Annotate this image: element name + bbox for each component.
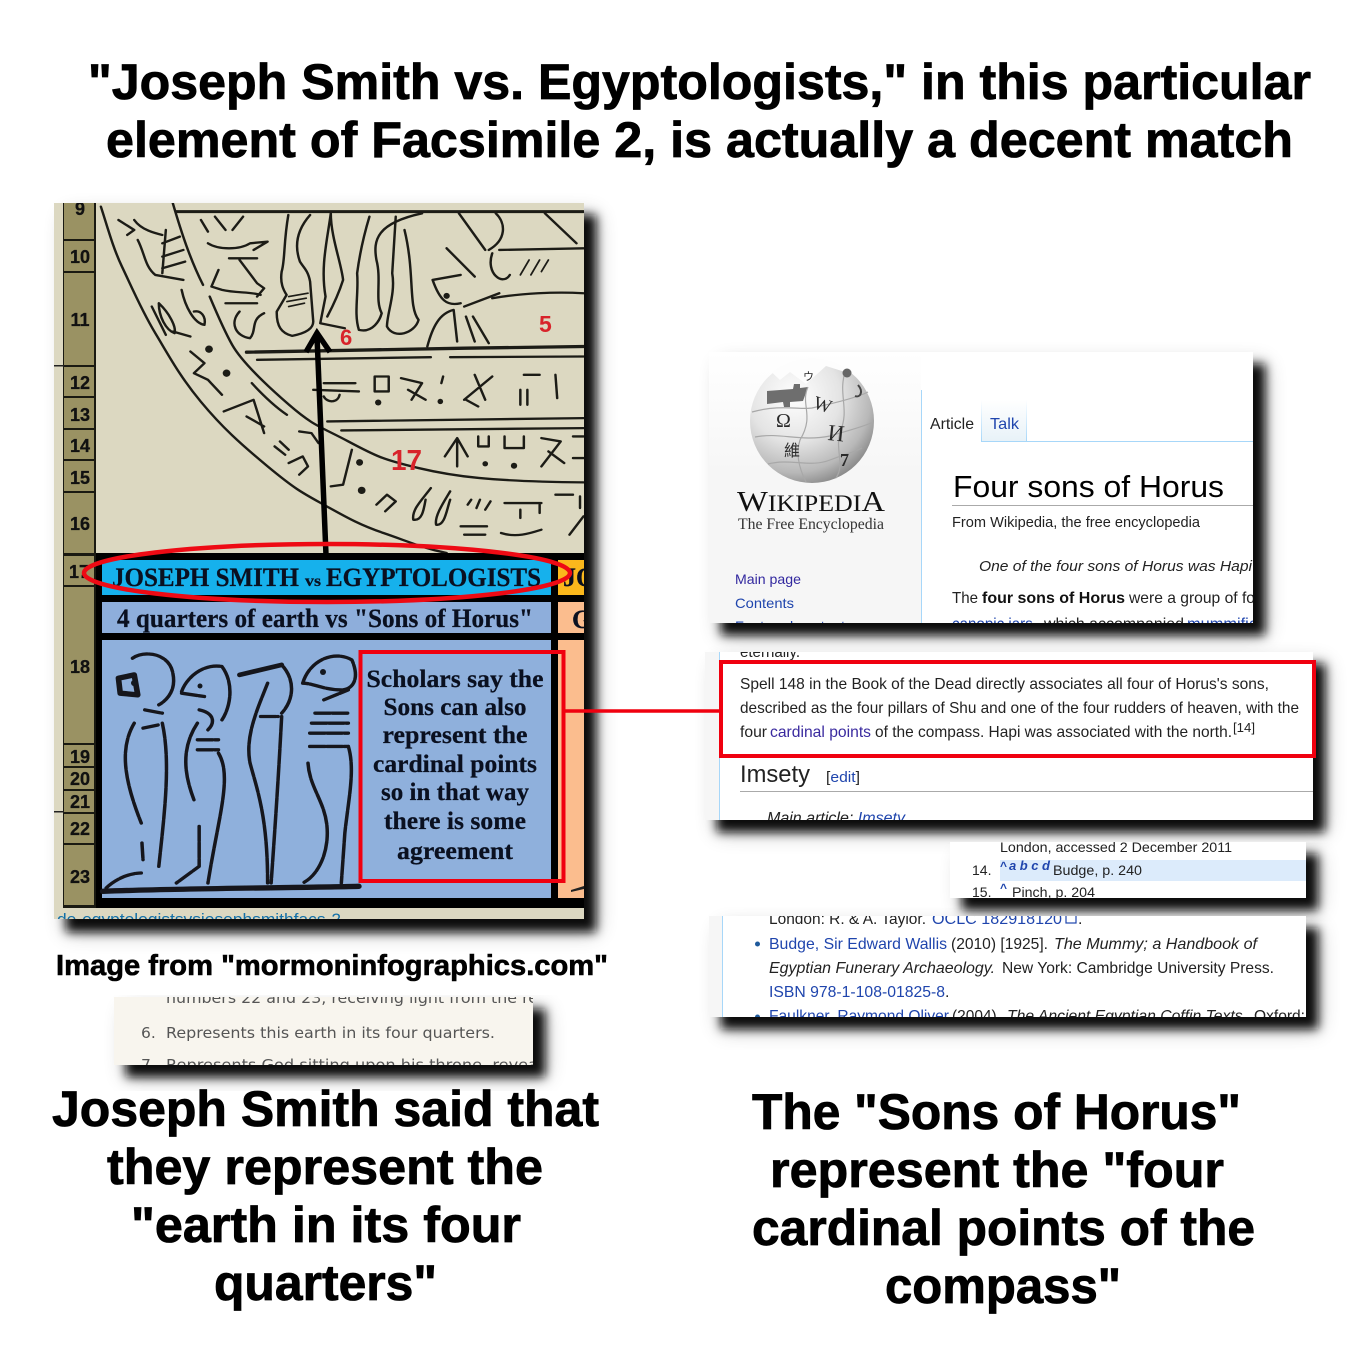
heading: Joseph Smith said: they represent the [107, 1139, 543, 1195]
row number column: 20 [70, 769, 90, 789]
panel: Joseph Smith explanation excerpt: Represents God sitting upon his throne, revea [166, 1056, 538, 1074]
title: "Joseph Smith vs. Egyptologists," in this particular [88, 54, 1311, 110]
bottom strip [54, 908, 584, 919]
panel: facsimile comparison chart: de-egyptologistsvsjosephsmithfacs-2 [57, 910, 341, 929]
title [88, 54, 1311, 168]
panel: Wikipedia reference list: London, accessed 2 December 2011 [1000, 839, 1232, 855]
article title: Four sons of Horus [953, 469, 1224, 504]
panel: Wikipedia reference list: 14. [972, 862, 991, 878]
panel: Wikipedia bibliography: New York: Cambridge University Press. [1002, 960, 1274, 977]
icon: Wikipedia globe: 7 [840, 450, 849, 470]
icon: Wikipedia globe: И [827, 420, 846, 447]
red ellipse highlight [84, 544, 570, 602]
blue canopic panel [102, 640, 551, 898]
panel: Wikipedia bibliography: London: R. & A. Taylor. [769, 911, 926, 928]
article intro [952, 516, 1253, 623]
marker 5: 5 [539, 311, 552, 337]
section heading: Imsety: [edit] [826, 769, 860, 786]
panel: Wikipedia reference list: Budge, p. 240 [1053, 862, 1142, 878]
heading cell: Joseph Smith vs Egyptologists: JOSEPH SMITH [112, 563, 299, 592]
row number column: 21 [70, 792, 90, 812]
article intro: canopic jars, [952, 616, 1037, 633]
panel: Wikipedia reference list [950, 839, 1318, 910]
article intro: which accompanied [1043, 616, 1184, 633]
sidebar links: Main page [735, 571, 801, 587]
right column cells: JO [563, 563, 596, 592]
arrow [306, 333, 330, 555]
section heading: Imsety: Imsety [740, 761, 810, 788]
marker 6: 6 [340, 325, 352, 350]
highlighted passage: Spell 148 in the Book of the Dead directly associates all four of Horus's sons, [740, 676, 1269, 693]
title: element of Facsimile 2, is actually a decent match [106, 112, 1293, 168]
red highlight box [721, 662, 1314, 756]
row number column: 13 [70, 405, 90, 425]
subheading cell: 4 quarters of earth vs "Sons of Horus" [117, 604, 533, 633]
row number column: 10 [70, 247, 90, 267]
highlighted passage: cardinal points [770, 724, 871, 741]
article intro: were a group of fo [1128, 590, 1255, 607]
panel: Wikipedia bibliography: Faulkner, Raymond Oliver [769, 1008, 950, 1025]
row number column: 23 [70, 867, 90, 887]
row number column: 15 [70, 468, 90, 488]
sidebar links: Featured content [735, 618, 845, 634]
panel: Wikipedia bibliography [709, 911, 1318, 1029]
panel: Joseph Smith explanation excerpt: 6. [141, 1024, 156, 1042]
panel: Wikipedia reference list: ^ [1000, 881, 1007, 895]
scholars note: there is some [384, 808, 526, 835]
panel: Wikipedia bibliography: Budge, Sir Edward Wallis [769, 936, 947, 953]
article intro: The [952, 590, 978, 607]
article intro: From Wikipedia, the free encyclopedia [952, 514, 1201, 531]
four sons figures [103, 654, 359, 891]
panel: Wikipedia bibliography: (2010) [1925]. [951, 936, 1048, 953]
row number column: 19 [70, 747, 90, 767]
panel: Wikipedia bibliography: (2004). [952, 1008, 1001, 1025]
panel: Wikipedia bibliography: Oxford: [1254, 1008, 1305, 1025]
animal figure [118, 220, 185, 280]
icon: Wikipedia globe: 維 [784, 437, 800, 461]
right column cells: G [572, 605, 592, 634]
highlighted passage: described as the four pillars of Shu and one of the four rudders of heaven, with the [740, 700, 1299, 717]
heading cell: Joseph Smith vs Egyptologists [102, 560, 551, 595]
highlighted passage: four [740, 724, 768, 741]
black table grid [96, 553, 584, 908]
panel: Wikipedia reference list: a b c d [1009, 858, 1051, 873]
row number column: 22 [70, 819, 90, 839]
right creature [427, 213, 510, 347]
icon: Wikipedia globe: W [811, 393, 834, 418]
panel: Wikipedia bibliography: . [945, 984, 949, 1001]
Wikipedia wordmark: WIKIPEDI A [737, 486, 885, 518]
heading: Joseph Smith said: quarters" [214, 1255, 437, 1311]
row number column: 12 [70, 373, 90, 393]
article intro: mummific [1187, 616, 1257, 633]
panel: Wikipedia bibliography: Egyptian Funerary Archaeology. [769, 960, 995, 977]
heading cell: Joseph Smith vs Egyptologists: vs [305, 573, 321, 590]
tabs: Talk [990, 416, 1020, 433]
panel: Wikipedia reference list: 15. [972, 884, 991, 900]
row number column: 14 [70, 436, 90, 456]
row number column: 9 [75, 199, 85, 219]
heading: Sons of Horus: The "Sons of Horus" [752, 1084, 1241, 1140]
panel: Joseph Smith explanation excerpt: 7. [141, 1056, 156, 1074]
row number column: 16 [70, 514, 90, 534]
highlighted passage: [14] [1233, 720, 1255, 735]
band glyphs middle [313, 375, 557, 406]
panel: Wikipedia cardinal points passage [705, 644, 1325, 832]
tabs [930, 400, 1253, 442]
article intro: four sons of Horus [982, 590, 1125, 607]
heading: Sons of Horus: represent the "four [770, 1142, 1224, 1198]
sidebar links [736, 574, 844, 623]
row number column: 18 [70, 657, 90, 677]
band glyphs lower right [445, 436, 584, 466]
panel: Wikipedia reference list: Pinch, p. 204 [1012, 884, 1095, 900]
panel: Wikipedia article header [709, 352, 1265, 635]
panel: Wikipedia bibliography: The Mummy; a Handbook of [1054, 936, 1259, 953]
sidebar links: Contents [735, 595, 794, 611]
highlighted passage: of the compass. Hapi was associated with the north. [875, 724, 1232, 741]
heading: Joseph Smith said [52, 1081, 599, 1311]
heading: Joseph Smith said: "earth in its four [131, 1197, 521, 1253]
heading: Joseph Smith said: Joseph Smith said that [52, 1081, 599, 1137]
four legs [277, 215, 313, 336]
panel: Joseph Smith explanation excerpt: Represents this earth in its four quarters. [166, 1024, 495, 1042]
scholars note: represent the [382, 722, 528, 749]
panel: Wikipedia bibliography: ISBN 978-1-108-01825-8 [769, 984, 945, 1001]
panel: Joseph Smith explanation excerpt [114, 989, 545, 1077]
panel: Wikipedia bibliography: . [1078, 911, 1082, 928]
row number column [54, 199, 96, 908]
heading cell: Joseph Smith vs Egyptologists: EGYPTOLOGISTS [326, 563, 541, 592]
scholars note: Sons can also [384, 694, 526, 721]
article intro: One of the four sons of Horus was Hapi [979, 558, 1253, 575]
facsimile drawing [101, 203, 584, 553]
panel: Wikipedia bibliography: The Ancient Egyptian Coffin Texts. [1007, 1008, 1247, 1025]
caption: image credit: Image from "mormoninfographics.com" [56, 950, 608, 982]
marker 17: 17 [391, 445, 422, 477]
panel: Wikipedia bibliography: OCLC 182918120 [932, 911, 1062, 928]
panel: Wikipedia cardinal points passage: eternally. [740, 644, 800, 661]
panel: Joseph Smith explanation excerpt: numbers 22 and 23, receiving light from the re [166, 989, 538, 1007]
band glyphs left [152, 290, 205, 337]
heading: Sons of Horus [752, 1084, 1255, 1314]
heading: Sons of Horus: compass" [885, 1258, 1121, 1314]
section heading: Imsety [740, 766, 1313, 792]
scholars note: agreement [397, 838, 514, 865]
scholars note: cardinal points [373, 751, 537, 778]
scholars note [366, 666, 544, 865]
Wikipedia wordmark [737, 492, 885, 532]
tabs: Article [930, 416, 974, 433]
scholars note: so in that way [381, 779, 529, 806]
panel: facsimile comparison chart [54, 199, 596, 932]
connector: red box to red box [360, 652, 720, 881]
icon: Wikipedia globe: Ω [776, 410, 791, 432]
row number column: 11 [70, 310, 90, 330]
icon: Wikipedia globe [750, 366, 874, 483]
scholars note: Scholars say the [366, 666, 544, 693]
icon: Wikipedia globe: ウ [803, 368, 814, 384]
Wikipedia wordmark: The Free Encyclopedia [738, 516, 884, 533]
row number column: 17 [69, 562, 89, 582]
right column cells [558, 560, 584, 898]
panel: Wikipedia cardinal points passage: Main article: Imsety [767, 810, 906, 827]
highlighted passage [740, 676, 1299, 741]
heading: Sons of Horus: cardinal points of the [752, 1200, 1255, 1256]
panel: Wikipedia reference list: ^ [1000, 859, 1007, 873]
